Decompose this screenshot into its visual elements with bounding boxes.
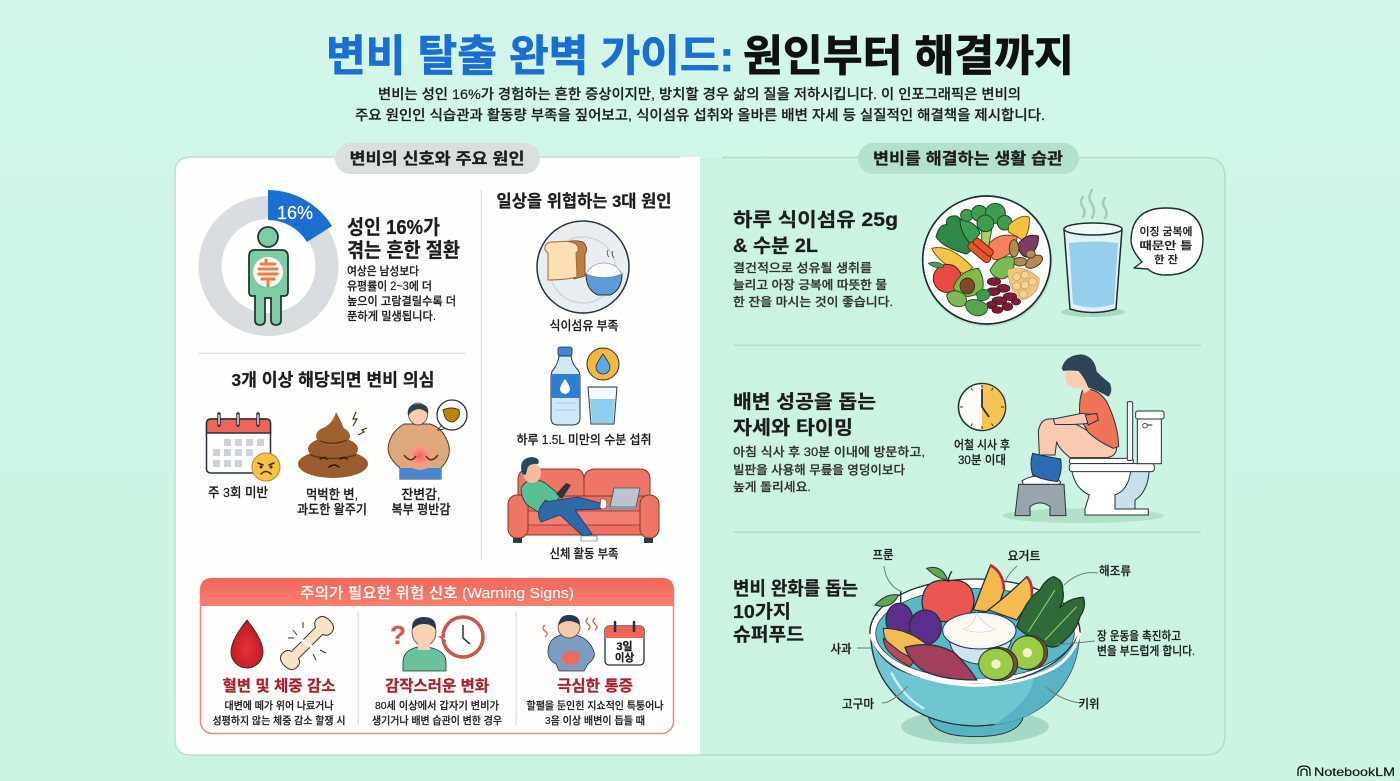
- section: posture and timing: 높게 돌리세요.: [733, 480, 811, 494]
- subtitle text: 변비는 성인 16%가 경험하는 흔한 증상이지만, 방치할 경우 삶의 질을 저하시킵니다. 이 인포그래픽은 변비의: [378, 86, 1021, 102]
- label: hard stool: 먹벅한 변,: [306, 487, 358, 502]
- icon: person in pain and calendar: 3일: [616, 639, 633, 653]
- warning item: sudden change: 80세 이상에서 갑자기 변비가: [375, 699, 499, 712]
- icon: person on toilet with footstool: [1003, 354, 1164, 523]
- food labels with leader lines: 장 운동을 촉진하고: [1097, 629, 1181, 643]
- panel: left causes: [175, 143, 700, 755]
- section: superfoods: 슈퍼푸드: [733, 624, 804, 645]
- title: 원인부터 해결까지: [743, 33, 1074, 81]
- left panel background: [175, 157, 700, 755]
- warning item: severe pain: 할펼을 둔인힌 지쇼적인 특퉁어나: [526, 699, 664, 712]
- section: posture and timing: [733, 354, 1164, 523]
- warning item: blood and weight loss: [212, 613, 346, 727]
- label: low activity: 신체 활동 부족: [550, 546, 618, 561]
- section: fiber and water: 하루 식이섬유 25g: [733, 209, 898, 231]
- panel: right habits frame: [700, 158, 1225, 755]
- checklist: three or more signs: [198, 190, 482, 560]
- warning item: severe pain: 3음 이상 배변이 듭들 때: [545, 714, 645, 727]
- warning item: blood and weight loss: 성평하지 않는 체중 감소 할쟁 시: [212, 714, 346, 727]
- section: posture and timing: 배변 성공을 돕는: [733, 391, 876, 413]
- label: fiber shortage: 식이섬유 부족: [550, 319, 618, 333]
- food labels with leader lines: 요거트: [1008, 549, 1040, 563]
- food labels with leader lines: 키위: [1078, 697, 1100, 711]
- icon: broken bone: [277, 613, 337, 673]
- heading pill: habits: 변비를 해결하는 생활 습관: [873, 150, 1063, 168]
- section: superfoods: 10가지: [733, 601, 791, 622]
- food labels with leader lines: 프룬: [872, 548, 894, 562]
- section: posture and timing: 아침 식사 후 30분 이내에 방문하고,: [733, 445, 925, 459]
- label: water intake: 하루 1.5L 미만의 수분 섭취: [516, 433, 652, 447]
- subtitle text: 주요 원인인 식습관과 활동량 부족을 짚어보고, 식이섬유 섭취와 올바른 배변 자세 등 실질적인 해결책을 제시합니다.: [355, 107, 1045, 123]
- icon: person in pain and calendar: 이상: [615, 651, 634, 664]
- text block: common condition: 유평률이 2~3에 더: [347, 280, 432, 293]
- section: fiber and water: 한 잔을 마시는 것이 좋습니다.: [733, 295, 893, 309]
- icon: bowl of superfoods: [870, 565, 1084, 744]
- callout: warm water bubble: 한 잔: [1154, 254, 1178, 266]
- icon: bloated person: [388, 400, 467, 479]
- label: hard stool: 과도한 왈주기: [297, 502, 367, 517]
- section: posture and timing: 자세와 타이밍: [733, 417, 853, 439]
- section: fiber and water: 결건적으로 성유될 생취를: [733, 261, 872, 275]
- section: fiber and water: 늘리고 아장 긍복에 따뜻한 물: [733, 278, 887, 292]
- callout: warm water bubble: 이징 굼복에: [1140, 226, 1192, 238]
- food labels with leader lines: [830, 548, 1195, 711]
- warning header band: [200, 578, 674, 606]
- title: [326, 33, 1074, 81]
- text block: common condition: 겪는 흔한 절환: [347, 239, 460, 262]
- icon: clock: [958, 384, 1006, 430]
- warning header band: 주의가 필요한 위험 신호 (Warning Signs): [300, 585, 574, 602]
- logo: NotebookLM: NotebookLM: [1314, 765, 1395, 779]
- label: less than 3 times: 주 3회 미반: [208, 485, 268, 500]
- icon: person with clock and question mark: ?: [390, 620, 406, 650]
- warning item: severe pain: [526, 615, 664, 727]
- icon: person on sofa: [508, 457, 659, 543]
- column: three main causes: [496, 192, 672, 561]
- warning item: blood and weight loss: 대변에 떼가 위어 나료거나: [224, 699, 334, 712]
- label: bloating: [392, 487, 451, 517]
- label: after meal: 어철 시사 후: [954, 438, 1010, 452]
- food labels with leader lines: 해조류: [1099, 564, 1131, 578]
- label: bloating: 복부 평반감: [392, 502, 451, 517]
- icon: glass of warm water: [1061, 190, 1125, 317]
- panel: warning signs: [200, 578, 674, 734]
- icon: plate of vegetables: [922, 196, 1052, 327]
- warning item: sudden change: 생기거나 배변 습관이 변한 경우: [372, 715, 502, 727]
- food labels with leader lines: 고구마: [842, 697, 874, 711]
- heading pill: signs and causes: [335, 143, 540, 174]
- donut chart: 16 percent: 16%: [277, 203, 313, 223]
- title: 변비 탈출 완벽 가이드:: [326, 33, 734, 81]
- section: superfoods: [733, 548, 1195, 744]
- text block: common condition: 성인 16%가: [347, 216, 440, 239]
- section: superfoods: 변비 완화를 돕는: [733, 578, 858, 599]
- label: bloating: 잔변감,: [402, 487, 440, 502]
- subtitle text: [355, 86, 1045, 123]
- warning item: blood and weight loss: 혈변 및 체중 감소: [222, 677, 336, 695]
- text block: common condition: 푼하게 밀생됩니다.: [347, 309, 436, 323]
- warning item: severe pain: 극심한 통증: [557, 677, 633, 695]
- checklist: three or more signs: 3개 이상 해당되면 변비 의심: [232, 370, 434, 390]
- icon: water bottle and glass: [551, 347, 619, 425]
- donut chart: 16 percent: [210, 190, 332, 325]
- food labels with leader lines: 사과: [830, 642, 852, 656]
- callout: warm water bubble: 때문안 틀: [1140, 239, 1193, 252]
- heading pill: habits: [858, 143, 1079, 174]
- heading pill: signs and causes: 변비의 신호와 주요 원인: [350, 150, 524, 168]
- section: fiber and water: [733, 190, 1203, 327]
- icon: person in pain and calendar: [543, 615, 644, 671]
- text block: common condition: 높으이 고람결릴수록 더: [347, 294, 456, 308]
- icon: blood drop: [231, 620, 263, 668]
- section: fiber and water: & 수분 2L: [733, 235, 818, 257]
- icon: human with intestine: [249, 227, 288, 325]
- section: posture and timing: 빌판을 사용해 무릎을 영덩이보다: [733, 463, 905, 477]
- text block: common condition: [347, 216, 460, 323]
- warning item: sudden change: 감작스러운 변화: [385, 677, 489, 695]
- text block: common condition: 여상은 남성보다: [347, 265, 419, 278]
- label: hard stool: [297, 487, 367, 517]
- label: after meal: [954, 438, 1010, 467]
- food labels with leader lines: 변을 부드럽게 합니다.: [1097, 643, 1195, 658]
- icon: plate with bread and rice: [537, 221, 629, 313]
- icon: poop: [298, 412, 368, 478]
- icon: calendar with sad face: [206, 414, 280, 481]
- callout: warm water bubble: [1131, 208, 1203, 275]
- label: after meal: 30분 이대: [958, 453, 1006, 467]
- warning item: sudden change: [372, 617, 502, 727]
- column: three main causes: 일상을 위협하는 3대 원인: [496, 192, 672, 211]
